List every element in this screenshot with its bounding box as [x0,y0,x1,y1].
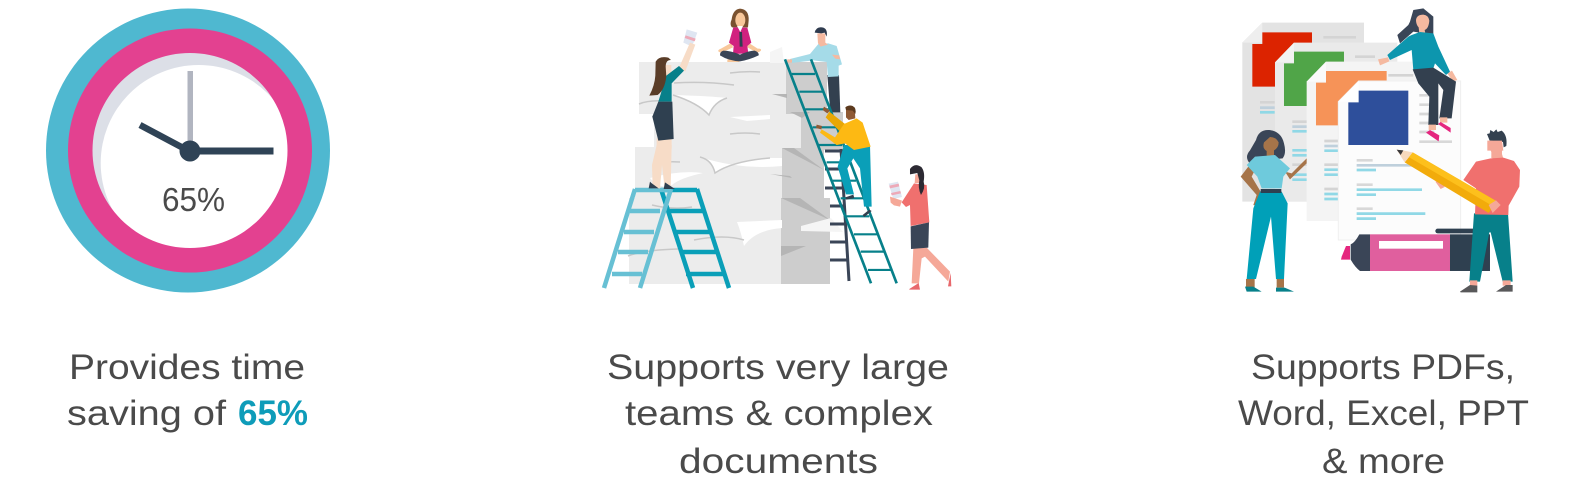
green document [1275,43,1397,202]
meditating woman [718,9,761,62]
illustration: file formats with people [1241,8,1520,292]
paper stack [628,47,843,284]
back ladder [825,149,849,281]
caption: time saving: 65% [238,394,308,433]
red document [1242,23,1364,202]
caption: team scale [607,348,949,481]
illustration: paper stack with team [604,9,951,290]
woman standing on ladder [649,29,697,189]
man in yellow sweater on ladder [816,106,872,217]
front teal ladder [785,59,897,283]
document stack [1242,23,1461,240]
caption: file formats: & more [1322,442,1445,481]
orange document [1307,62,1433,221]
blue document [1338,81,1461,240]
standing woman in teal [1241,130,1307,292]
woman sitting on documents [1378,8,1457,141]
woman in coral top with paper [889,165,951,290]
caption: file formats [1238,348,1529,481]
man on top of ladder [787,27,842,112]
caption: time saving: saving of [67,394,226,433]
caption: file formats: Word, Excel, PPT [1238,394,1529,433]
clock icon: 65% [162,181,225,218]
caption: team scale: teams & complex [625,394,934,433]
man holding pencil [1397,143,1520,292]
left step ladder [604,189,729,288]
man's head [1487,129,1507,151]
caption: team scale: Supports very large [607,348,949,387]
highlighter [1341,229,1490,271]
caption: file formats: Supports PDFs, [1251,348,1515,387]
caption: time saving [67,348,308,433]
clock icon [46,8,330,292]
caption: team scale: documents [679,442,878,481]
caption: time saving: Provides time [69,348,305,387]
